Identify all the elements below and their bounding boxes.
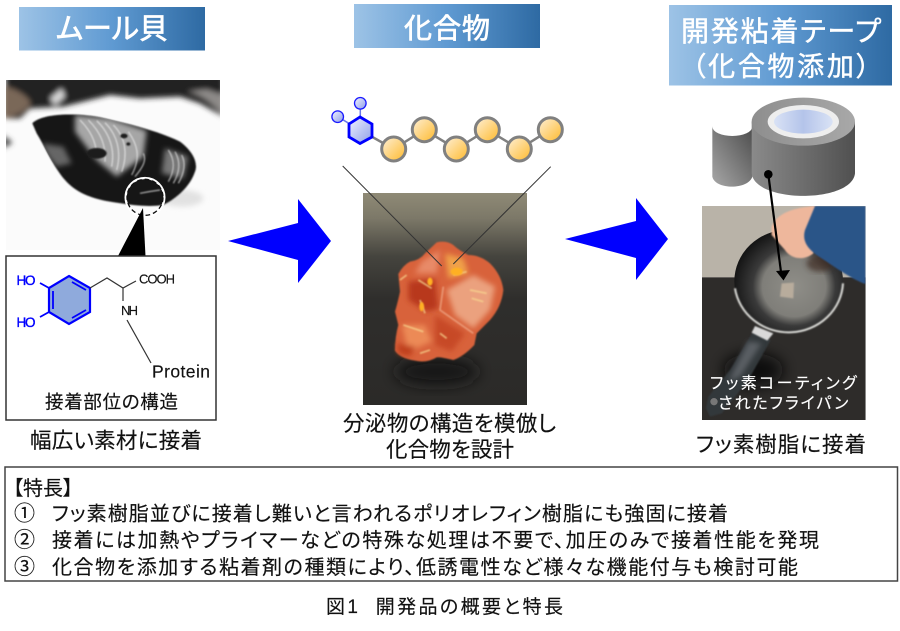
caption: design compound mimicking secretion: 分泌物の構造を模倣し <box>343 412 556 436</box>
structure box <box>6 256 216 420</box>
caption: design compound mimicking secretion: 化合物を設計 <box>386 438 514 462</box>
heading: features: 【特長】 <box>13 477 73 500</box>
caption: design compound mimicking secretion <box>343 412 556 462</box>
feature 2: 接着には加熱やプライマーなどの特殊な処理は不要で、加圧のみで接着性能を発現 <box>52 529 819 552</box>
panel: features <box>5 467 898 581</box>
arrow: mussel to compound <box>228 199 331 283</box>
chemical structure: catechol amino acid: HO <box>16 315 36 330</box>
chemical structure: catechol amino acid <box>16 272 210 382</box>
chemical structure: catechol amino acid: Protein <box>152 362 210 382</box>
feature 2: ② <box>14 529 35 552</box>
label: structure of adhesion site: 接着部位の構造 <box>45 392 178 412</box>
photo: fluorine-coated frying pan: フッ素コーティング <box>710 374 858 392</box>
lines from molecule to lump <box>343 166 551 266</box>
chemical structure: catechol amino acid: NH <box>121 303 138 318</box>
photo: amber compound lump <box>363 193 527 405</box>
feature 3: 化合物を添加する粘着剤の種類により、低誘電性など様々な機能付与も検討可能 <box>52 556 798 579</box>
heading: mussel <box>19 7 205 50</box>
panel: compound <box>332 4 562 462</box>
caption: adheres to fluororesin: フッ素樹脂に接着 <box>696 433 866 457</box>
feature 3: ③ <box>14 556 35 579</box>
heading: developed adhesive tape <box>669 5 892 86</box>
photo: mussel shell <box>6 80 220 216</box>
arrow: tape to pan surface <box>764 170 790 280</box>
arrow: compound to tape <box>565 198 668 280</box>
feature 1: ① <box>14 502 35 526</box>
heading: compound <box>354 4 540 48</box>
icon: tape roll <box>712 98 855 196</box>
molecule diagram <box>332 98 562 161</box>
photo: fluorine-coated frying pan <box>702 206 866 420</box>
callout pointer <box>118 208 146 256</box>
caption: adheres to wide range of materials: 幅広い素材に接着 <box>30 429 202 453</box>
chemical structure: catechol amino acid: COOH <box>139 272 175 286</box>
panel: developed adhesive tape <box>669 5 892 457</box>
chemical structure: catechol amino acid: HO <box>16 273 36 288</box>
figure caption: 図1 開発品の概要と特長 <box>326 596 563 618</box>
heading: developed adhesive tape: （化合物添加） <box>692 52 870 82</box>
heading: mussel: ムール貝 <box>56 14 168 46</box>
photo: fluorine-coated frying pan: されたフライパン <box>718 394 848 412</box>
panel: mussel <box>3 7 223 453</box>
feature 1: フッ素樹脂並びに接着し難いと言われるポリオレフィン樹脂にも強固に接着 <box>52 502 728 526</box>
heading: compound: 化合物 <box>404 13 490 44</box>
heading: developed adhesive tape: 開発粘着テープ <box>681 16 882 47</box>
